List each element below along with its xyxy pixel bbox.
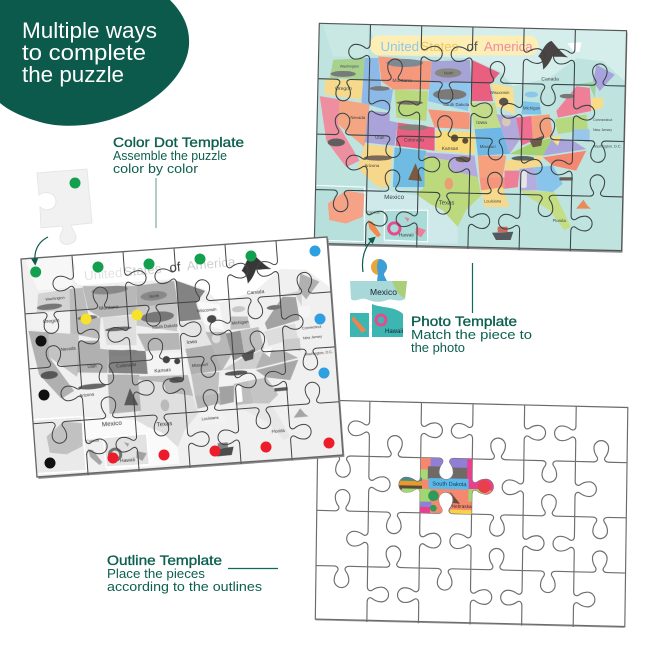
text block: photo template: the photo [411,340,465,355]
coloured puzzle piece in outline: Nebraska [452,504,472,509]
photo template puzzle piece: Mexico [370,287,397,297]
panel: photo template coloured map: United [381,39,419,54]
title [22,18,157,87]
text block: outline template [107,552,263,594]
text block: photo template: Match the piece to [411,327,532,342]
connector line: photo label [472,263,474,313]
text block: photo template [411,313,532,355]
connector line: color dot label [155,178,157,228]
text block: outline template: Outline Template [107,552,222,568]
connector line: outline label [228,568,278,570]
title: to complete [22,40,146,65]
title: Multiple ways [22,18,157,43]
arrow: piece to green dot [35,237,48,262]
text block: color dot template [113,134,244,176]
panel: color dot grayscale map: of [169,259,182,275]
panel: photo template coloured map: States [421,39,459,54]
title: the puzzle [22,62,124,87]
arrow: photo piece to map [362,239,373,272]
coloured puzzle piece in outline [399,458,494,514]
panel: color dot grayscale map [20,236,344,479]
text block: color dot template: color by color [113,161,199,176]
photo template puzzle piece: Hawaii [385,329,403,335]
panel: photo template coloured map: of [467,39,478,54]
panel: outline template [315,400,628,628]
panel: color dot grayscale map: United [83,265,123,283]
panel: color dot grayscale map: States [123,261,162,279]
coloured puzzle piece in outline: South Dakota [432,481,467,488]
panel: photo template coloured map [314,22,628,253]
photo template puzzle piece [350,259,407,337]
text block: outline template: according to the outlines [107,579,263,594]
text block: outline template: Place the pieces [107,566,205,581]
text block: color dot template: Color Dot Template [113,134,244,150]
loose blank puzzle piece with green dot [37,169,92,244]
color dots on gray map [30,246,334,468]
text block: color dot template: Assemble the puzzle [113,148,227,163]
panel: color dot grayscale map: America [186,254,237,273]
text block: photo template: Photo Template [411,313,517,329]
panel: photo template coloured map: America [484,39,533,54]
header blob with title [0,0,189,126]
